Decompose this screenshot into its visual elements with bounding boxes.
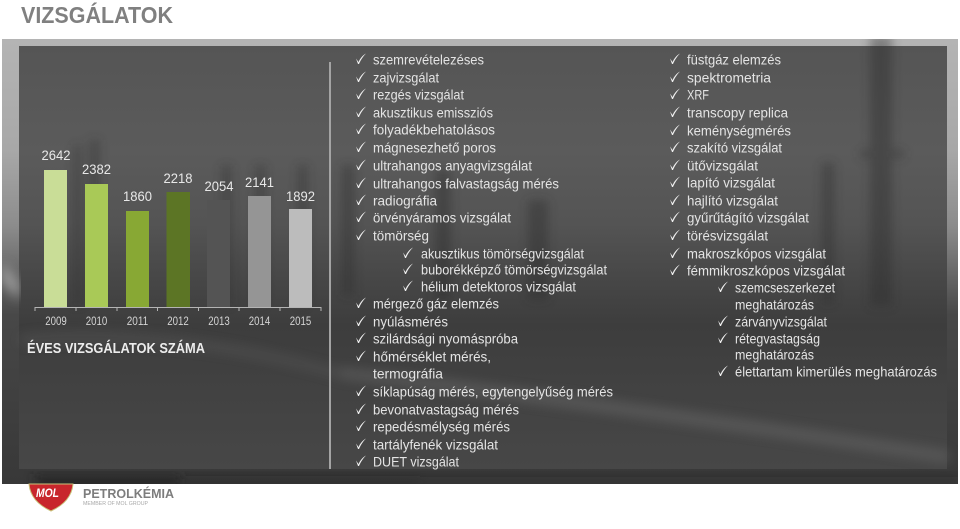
logo: Petrolkémia wordmark: MEMBER OF MOL GROUP: [83, 501, 148, 507]
year labels: 2012: [167, 316, 189, 328]
list: left column of inspections: [356, 52, 613, 470]
bar chart: annual inspections: [35, 147, 321, 328]
list: right column of inspections: [670, 52, 937, 380]
value labels: 2642: [42, 147, 71, 163]
list: left column of inspections: zajvizsgálat: [373, 70, 439, 86]
list: left column of inspections: szilárdsági nyomáspróba: [373, 330, 518, 346]
list: left column of inspections: ultrahangos anyagvizsgálat: [373, 158, 532, 174]
bright streak at left edge: [2, 262, 19, 300]
list: right column of inspections: élettartam kimerülés meghatározás: [735, 364, 937, 380]
list: right column of inspections: hajlító vizsgálat: [687, 192, 778, 208]
list: right column of inspections: fémmikroszkópos vizsgálat: [687, 262, 845, 278]
year labels: 2014: [249, 316, 271, 328]
list: left column of inspections: hélium detektoros vizsgálat: [421, 278, 576, 294]
list: left column of inspections: rezgés vizsgálat: [373, 86, 464, 102]
list: left column of inspections: DUET vizsgálat: [373, 454, 459, 470]
list: left column of inspections: mérgező gáz elemzés: [373, 296, 499, 312]
list: left column of inspections: tartályfenék vizsgálat: [373, 436, 498, 452]
bar 2009: [44, 170, 67, 307]
list: left column of inspections: repedésmélység mérés: [373, 418, 510, 434]
list: left column of inspections: bevonatvastagság mérés: [373, 402, 519, 418]
list: left column of inspections: nyúlásmérés: [373, 314, 448, 330]
bar 2015: [289, 209, 312, 307]
chart heading: ÉVES VIZSGÁLATOK SZÁMA: [27, 340, 205, 357]
list: right column of inspections: ütővizsgálat: [687, 158, 758, 174]
bar 2012: [166, 192, 190, 307]
list: right column of inspections: transcopy replica: [687, 104, 788, 120]
list: right column of inspections: XRF: [687, 86, 709, 102]
value labels: 1892: [286, 188, 315, 204]
list: left column of inspections: hőmérséklet mérés,: [373, 348, 491, 364]
year labels: 2015: [290, 316, 311, 328]
list: left column of inspections: tömörség: [373, 228, 429, 244]
chart axis: [35, 308, 321, 311]
value labels: 2218: [164, 170, 193, 186]
logo: Petrolkémia wordmark: PETROLKÉMIA: [83, 486, 174, 501]
year labels: 2013: [208, 316, 230, 328]
list: left column of inspections: buborékképző tömörségvizsgálat: [421, 262, 607, 278]
list: left column of inspections: akusztikus emissziós: [373, 104, 493, 120]
list: right column of inspections: szemcseszerkezet: [735, 280, 835, 296]
list: right column of inspections: spektrometria: [687, 70, 771, 86]
year labels: 2010: [86, 316, 107, 328]
list: left column of inspections: akusztikus tömörségvizsgálat: [421, 246, 584, 262]
bar 2013: [207, 200, 230, 307]
list: left column of inspections: örvényáramos vizsgálat: [373, 210, 511, 226]
list: right column of inspections: zárványvizsgálat: [735, 314, 827, 330]
bar 2010: [85, 184, 108, 307]
list: left column of inspections: síklapúság mérés, egytengelyűség mérés: [373, 384, 613, 400]
list: right column of inspections: meghatározás: [735, 296, 814, 312]
value labels: [42, 147, 315, 204]
logo: MOL shield: [29, 484, 73, 511]
list: right column of inspections: gyűrűtágító vizsgálat: [687, 210, 809, 226]
year labels: [45, 316, 311, 328]
list: left column of inspections: termográfia: [373, 366, 443, 382]
list: right column of inspections: törésvizsgálat: [687, 228, 768, 244]
value labels: 1860: [123, 188, 152, 204]
list: right column of inspections: rétegvastagság: [735, 330, 820, 346]
chart divider line: [329, 62, 331, 469]
list: left column of inspections: mágnesezhető poros: [373, 140, 496, 156]
list: left column of inspections: radiográfia: [373, 192, 437, 208]
value labels: 2141: [245, 174, 274, 190]
list: right column of inspections: keménységmérés: [687, 122, 791, 138]
logo: MOL shield: MOL: [36, 486, 59, 500]
value labels: 2382: [82, 161, 111, 177]
logo: Petrolkémia wordmark: [83, 486, 174, 507]
year labels: 2011: [127, 316, 148, 328]
list: right column of inspections: szakító vizsgálat: [687, 140, 782, 156]
value labels: 2054: [204, 178, 234, 194]
bar 2014: [248, 196, 271, 307]
list: right column of inspections: füstgáz elemzés: [687, 52, 781, 68]
title: VIZSGÁLATOK: [21, 1, 173, 28]
list: right column of inspections: lapító vizsgálat: [687, 174, 775, 190]
year labels: 2009: [45, 316, 67, 328]
bar 2011: [126, 211, 149, 307]
list: left column of inspections: folyadékbehatolásos: [373, 122, 495, 138]
list: right column of inspections: makroszkópos vizsgálat: [687, 246, 826, 262]
list: right column of inspections: meghatározás: [735, 346, 814, 362]
list: left column of inspections: ultrahangos falvastagság mérés: [373, 176, 559, 192]
list: left column of inspections: szemrevételezéses: [373, 52, 484, 68]
